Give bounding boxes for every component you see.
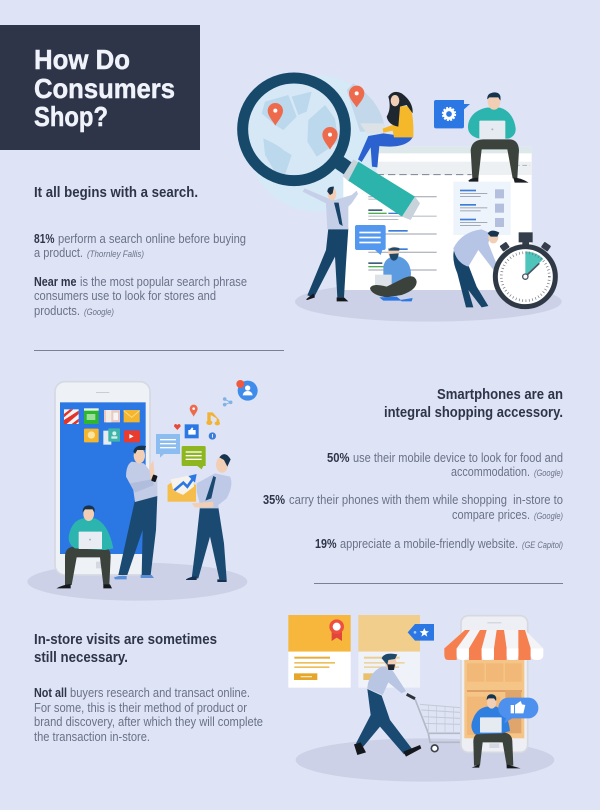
heading: smartphones bbox=[384, 386, 563, 421]
app icons bbox=[64, 408, 140, 445]
icon: stopwatch bbox=[495, 232, 555, 307]
woman in yellow jacket bbox=[358, 92, 413, 167]
shop phone bbox=[444, 616, 543, 752]
text block: in-store bbox=[34, 686, 263, 744]
icon: music note bbox=[206, 412, 220, 425]
icon: thumbs up bubble bbox=[498, 698, 538, 723]
seated man with laptop bbox=[471, 694, 521, 768]
text block: search stats: perform a search online before buying bbox=[58, 232, 246, 246]
continents bbox=[262, 92, 338, 175]
sidebar panel bbox=[453, 182, 511, 235]
heading: smartphones: Smartphones are an bbox=[437, 386, 563, 403]
text block: smartphone stats: (Google) bbox=[534, 468, 563, 478]
bearded man sitting bbox=[370, 247, 417, 301]
text block: smartphone stats bbox=[263, 451, 563, 551]
title panel: Consumers bbox=[34, 73, 175, 104]
text block: search stats: (Thornley Fallis) bbox=[87, 249, 144, 259]
text block: smartphone stats: carry their phones with them while shopping in-store to bbox=[289, 493, 563, 507]
text block: search stats: 81% bbox=[34, 232, 54, 246]
icon: price tag bbox=[408, 624, 434, 641]
magnifying glass bbox=[243, 78, 420, 220]
icon: location pin bbox=[190, 405, 198, 417]
browser window bbox=[343, 147, 532, 290]
shopping cart bbox=[407, 694, 460, 752]
man holding magnifier bbox=[303, 187, 358, 301]
text block: smartphone stats: (Google) bbox=[534, 511, 563, 521]
product card 2 bbox=[358, 615, 420, 688]
text block: smartphone stats: 50% bbox=[327, 451, 350, 465]
text block: smartphone stats: 35% bbox=[263, 493, 285, 507]
title panel bbox=[0, 25, 200, 150]
illustration: in-store bbox=[288, 615, 554, 782]
text block: search stats: Near me bbox=[34, 275, 77, 289]
heading: search: It all begins with a search. bbox=[34, 184, 198, 201]
text block: smartphone stats: (GE Capitol) bbox=[522, 540, 563, 550]
title panel: Shop? bbox=[34, 101, 108, 132]
text block: in-store: buyers research and transact online. bbox=[70, 686, 250, 700]
text block: search stats bbox=[34, 232, 247, 318]
icon: gear bubble bbox=[434, 100, 470, 128]
text block: search stats: a product. bbox=[34, 246, 83, 260]
text block: in-store: For some, this is their method of product or bbox=[34, 701, 247, 715]
standing man with envelope bbox=[186, 454, 231, 582]
text block: in-store: Not all bbox=[34, 686, 67, 700]
text block: smartphone stats: use their mobile device to look for food and bbox=[353, 451, 563, 465]
icon: map pin left bbox=[268, 103, 283, 126]
handle bbox=[335, 157, 354, 176]
icon: map pin right bbox=[322, 127, 338, 150]
icon: thumbs up bbox=[185, 424, 199, 438]
awning bbox=[444, 630, 543, 660]
text block: search stats: products. bbox=[34, 304, 80, 318]
title panel: How Do bbox=[34, 44, 130, 75]
product card 1 bbox=[288, 615, 351, 688]
man pushing cart bbox=[354, 654, 421, 757]
text block: search stats: is the most popular search phrase bbox=[80, 275, 247, 289]
icon: share bbox=[223, 397, 232, 406]
heading: smartphones: integral shopping accessory. bbox=[384, 404, 563, 421]
heading: in-store bbox=[34, 631, 217, 666]
search results bbox=[368, 196, 437, 271]
text block: smartphone stats: 19% bbox=[315, 537, 336, 551]
heading: in-store: still necessary. bbox=[34, 649, 128, 666]
text block: in-store: brand discovery, after which they will complete bbox=[34, 715, 263, 729]
man with laptop, top right bbox=[468, 92, 529, 183]
illustration: smartphone bbox=[27, 380, 258, 601]
icon: blue chat bubble bbox=[156, 434, 180, 458]
text block: search stats: (Google) bbox=[84, 307, 114, 317]
heading: in-store: In-store visits are sometimes bbox=[34, 631, 217, 648]
icon: blue speech bubble bbox=[355, 225, 386, 255]
globe bbox=[248, 75, 385, 212]
icon: small note circle bbox=[209, 432, 216, 440]
icon: envelope with growth arrow bbox=[168, 474, 197, 502]
seated man with laptop bbox=[56, 505, 113, 589]
ground shadow bbox=[296, 738, 554, 782]
icon: user badge bbox=[236, 380, 258, 401]
icon: map pin top bbox=[349, 86, 364, 107]
icon: heart bbox=[174, 424, 181, 430]
icon: green chat bubble bbox=[182, 446, 206, 469]
text block: in-store: the transaction in-store. bbox=[34, 730, 150, 744]
standing man with phone bbox=[114, 446, 158, 579]
ground shadow bbox=[27, 563, 247, 601]
man with stopwatch bbox=[453, 229, 499, 307]
illustration: search bbox=[243, 75, 562, 322]
text block: smartphone stats: compare prices. bbox=[452, 508, 530, 522]
text block: smartphone stats: accommodation. bbox=[451, 465, 530, 479]
icon: ribbon badge bbox=[329, 619, 344, 641]
phone bbox=[55, 382, 150, 575]
ground shadow bbox=[295, 282, 562, 322]
text block: smartphone stats: appreciate a mobile-friendly website. bbox=[340, 537, 518, 551]
text block: search stats: consumers use to look for stores and bbox=[34, 289, 216, 303]
